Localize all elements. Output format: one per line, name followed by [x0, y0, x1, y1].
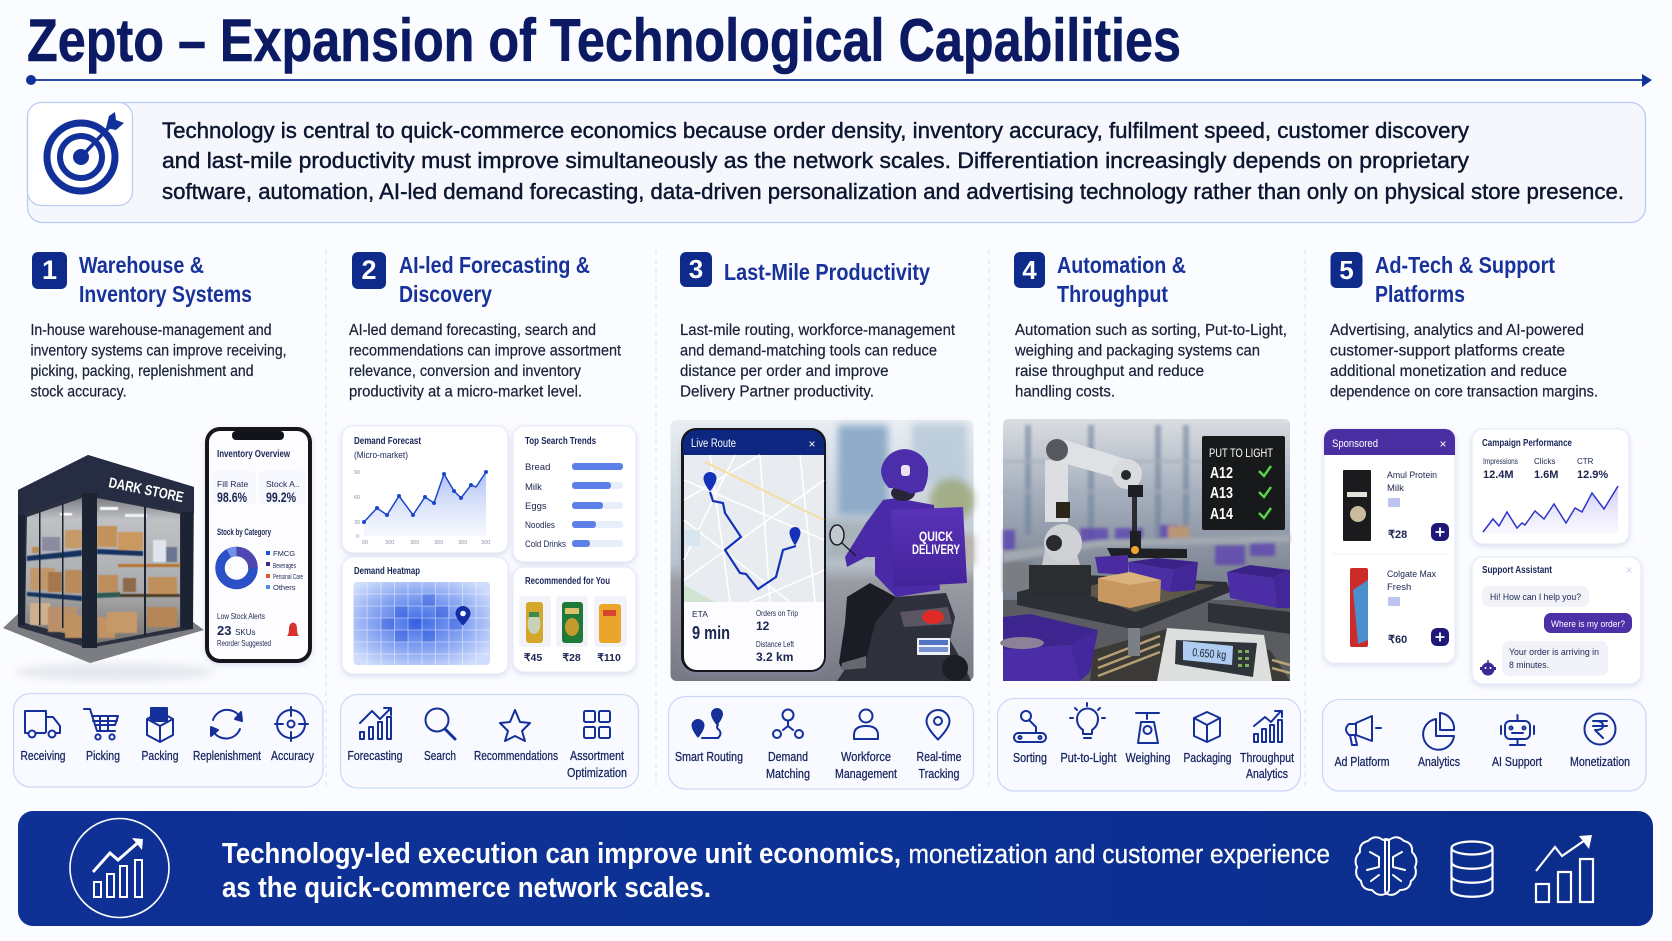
- panel: footer banner: [18, 811, 1653, 926]
- icon labels 5: [1334, 755, 1630, 769]
- body text 4: handling costs.: [1015, 384, 1115, 400]
- map streets: [684, 455, 824, 602]
- body text 1: In-house warehouse-management and: [30, 322, 272, 339]
- icon: demand matching: [773, 710, 803, 738]
- chart: demand forecast: [342, 426, 508, 553]
- icon labels 3: Workforce: [841, 750, 891, 764]
- body text 1: inventory systems can improve receiving,: [30, 342, 286, 360]
- chart: demand forecast: 300: [410, 540, 419, 546]
- heading 5: Platforms: [1375, 281, 1465, 307]
- panel: automation and throughput: [998, 252, 1300, 791]
- icon: put-to-light bulb: [1070, 703, 1105, 738]
- card: recommended for you: [513, 567, 636, 672]
- card: sponsored products: Milk: [1387, 483, 1404, 494]
- body text 3: distance per order and improve: [680, 363, 888, 380]
- chart: campaign performance: Impressions: [1483, 457, 1518, 466]
- icon labels 3: Matching: [766, 767, 810, 781]
- icon: ai support robot: [1501, 715, 1534, 745]
- chart: demand forecast: 300: [385, 540, 394, 546]
- banner text: [222, 838, 1330, 904]
- chart: demand forecast: Demand Forecast: [354, 436, 422, 447]
- icon labels 4: Sorting: [1013, 751, 1047, 765]
- card: support assistant: Support Assistant: [1482, 565, 1553, 576]
- body text 4: raise throughput and reduce: [1015, 363, 1204, 380]
- chart: demand forecast: 30: [354, 520, 360, 526]
- heading 2: Discovery: [399, 281, 492, 307]
- badge 5: [1330, 252, 1362, 288]
- bar chart: top search trends: Bread: [525, 462, 550, 473]
- icon: sorting: [1014, 711, 1046, 742]
- body text 2: AI-led demand forecasting, search and: [349, 322, 596, 339]
- chart: campaign performance: [1472, 429, 1629, 544]
- icon labels 2: Assortment: [570, 749, 624, 763]
- card: support assistant: ×: [1625, 563, 1633, 577]
- icon labels 1: Replenishment: [193, 749, 261, 763]
- heading 4: Throughput: [1057, 281, 1168, 307]
- floor and lower rollers: [1003, 600, 1290, 681]
- body text 3: and demand-matching tools can reduce: [680, 342, 937, 360]
- column dividers: [326, 250, 1305, 790]
- icon: analytics pie: [1423, 713, 1454, 750]
- cardboard box: [1098, 572, 1161, 608]
- bar chart: top search trends: Eggs: [525, 501, 547, 512]
- icon: weighing scale: [1136, 713, 1159, 743]
- icon: forecasting chart: [360, 708, 391, 739]
- route line: [710, 492, 796, 589]
- badge 3: 3: [689, 254, 703, 284]
- badge 2: 2: [361, 255, 377, 285]
- icon labels 1: [20, 749, 315, 763]
- body text 2: productivity at a micro-market level.: [349, 384, 582, 400]
- icon strip 5: [1322, 700, 1646, 791]
- chart: demand forecast: 300: [481, 540, 490, 546]
- chart: campaign performance: CTR: [1577, 457, 1594, 466]
- body text 2: relevance, conversion and inventory: [349, 363, 581, 380]
- icon: accuracy crosshair: [275, 707, 308, 741]
- donut legend: [266, 549, 303, 592]
- body text 5: customer-support platforms create: [1330, 342, 1565, 360]
- body text 5: dependence on core transaction margins.: [1330, 384, 1598, 400]
- dark store illustration: [3, 455, 215, 681]
- phone: inventory overview: Low Stock Alerts: [217, 611, 265, 621]
- phone: live route: ETA: [692, 609, 708, 619]
- chart: demand forecast: 300: [458, 540, 467, 546]
- card: support assistant: Where is my order?: [1551, 619, 1625, 630]
- icon labels 5: Monetization: [1570, 755, 1630, 769]
- weighing scale: 0.650 kg: [1192, 647, 1227, 662]
- panel: ai-led forecasting and discovery: [340, 252, 638, 788]
- body text 4: weighing and packaging systems can: [1014, 342, 1260, 360]
- icon labels 4: Weighing: [1126, 751, 1171, 765]
- phone: inventory overview: 23 SKUs: [217, 623, 256, 638]
- icon labels 2: Optimization: [567, 766, 627, 780]
- icon labels 1: Accuracy: [271, 749, 315, 763]
- phone: live route: 3.2 km: [756, 650, 793, 664]
- phone: live route: Orders on Trip: [756, 608, 798, 618]
- icon labels 4: Put-to-Light: [1060, 751, 1117, 765]
- icon strip 2: [340, 694, 638, 788]
- badge 3: [680, 252, 712, 287]
- icon labels 3: Tracking: [918, 767, 960, 781]
- heading 1: [79, 252, 252, 307]
- scooter and rider: [830, 449, 971, 681]
- icon labels 1: Packing: [142, 749, 179, 763]
- body text 3: Last-mile routing, workforce-management: [680, 322, 956, 339]
- card: recommended for you: ₹28: [562, 652, 581, 664]
- icon: truck: [25, 711, 60, 738]
- icon: assortment grid: [584, 711, 610, 738]
- chart: campaign performance: 12.9%: [1577, 469, 1608, 481]
- weighing scale: [1157, 628, 1272, 681]
- chart: campaign performance: Campaign Performance: [1482, 438, 1572, 449]
- heading 2: AI-led Forecasting &: [399, 252, 590, 278]
- heading 3: Last-Mile Productivity: [724, 259, 930, 285]
- icon labels 3: Management: [835, 767, 897, 781]
- icon labels 1: Receiving: [20, 749, 66, 763]
- donut legend: FMCG: [273, 549, 295, 558]
- icon labels 5: AI Support: [1492, 755, 1542, 769]
- card: sponsored products: ₹60: [1388, 634, 1407, 646]
- scooter and rider: QUICK: [919, 529, 953, 544]
- icon labels 3: Smart Routing: [675, 750, 743, 764]
- card: recommended for you: ₹110: [597, 652, 621, 664]
- dark store illustration: DARK STORE: [107, 475, 185, 506]
- badge 2: [352, 252, 386, 289]
- icon labels 4: Throughput: [1240, 751, 1294, 765]
- sign: put to light: A12: [1210, 465, 1233, 482]
- card: sponsored products: Amul Protein: [1387, 470, 1437, 481]
- body text 5: Advertising, analytics and AI-powered: [1330, 322, 1584, 339]
- heading 4: Automation &: [1057, 252, 1186, 278]
- badge 4: 4: [1022, 255, 1037, 285]
- intro text: software, automation, AI-led demand forecasting, data-driven personalization and advertising technology rather than only on physical store presence.: [162, 179, 1624, 204]
- icon strip 3: [668, 696, 974, 789]
- sign: put to light: A13: [1210, 485, 1233, 502]
- card: recommended for you: ₹45: [524, 652, 542, 664]
- phone: live route: Distance Left: [756, 639, 794, 649]
- panel: last-mile productivity: [668, 252, 974, 789]
- sign: put to light: A14: [1210, 506, 1233, 523]
- heading 2: [399, 252, 590, 307]
- phone: live route: Live Route: [691, 438, 736, 450]
- body text 2: recommendations can improve assortment: [349, 342, 622, 360]
- icon labels 3: Demand: [768, 750, 808, 764]
- conveyor table: [1017, 575, 1230, 630]
- icon labels 2: Forecasting: [348, 749, 403, 763]
- heading 1: Warehouse &: [79, 252, 204, 278]
- title: Zepto – Expansion of Technological Capabilities: [27, 7, 1181, 74]
- chart: campaign performance: Clicks: [1534, 457, 1555, 466]
- badge 4: [1014, 252, 1045, 288]
- icon labels 2: Search: [424, 749, 456, 763]
- card: support assistant: Hi! How can I help you?: [1490, 592, 1581, 603]
- body text 5: additional monetization and reduce: [1330, 363, 1567, 380]
- sign: put to light: PUT TO LIGHT: [1209, 446, 1274, 460]
- badge 1: [32, 252, 67, 289]
- donut legend: Personal Care: [273, 572, 303, 581]
- donut chart: [214, 546, 259, 590]
- body text 3: [680, 322, 956, 400]
- phone: inventory overview: Inventory Overview: [217, 448, 291, 460]
- illustration: robot arm and conveyor: [1000, 419, 1290, 681]
- icon: bell: [287, 622, 299, 636]
- bar chart: top search trends: Noodles: [525, 520, 555, 531]
- arrow: title rule: [26, 74, 1652, 87]
- icon: monetization rupee: [1584, 714, 1616, 744]
- icon: real-time tracking pin: [926, 710, 950, 740]
- icon: workforce person: [854, 710, 878, 739]
- panel: ad-tech and support platforms: [1322, 252, 1646, 791]
- intro text: [162, 118, 1624, 204]
- icon: map pin: [456, 606, 470, 626]
- chart: demand forecast: 300: [434, 540, 443, 546]
- shelves and boxes: [32, 547, 39, 553]
- card: recommended for you: Recommended for You: [525, 576, 610, 587]
- icon labels 2: Recommendations: [474, 749, 558, 763]
- banner text: as the quick-commerce network scales.: [222, 872, 711, 904]
- icon: brain: [1356, 837, 1416, 895]
- intro text: Technology is central to quick-commerce economics because order density, inventory accuracy, fulfilment speed, customer discovery: [162, 118, 1469, 143]
- bar chart: top search trends: Milk: [525, 482, 542, 493]
- icon labels 4: [1013, 751, 1294, 781]
- sign: put to light: [1202, 436, 1285, 530]
- body text 1: [30, 322, 286, 400]
- icon strip 1: [14, 694, 323, 787]
- icon: ad platform megaphone: [1346, 716, 1381, 745]
- card: sponsored products: Sponsored: [1332, 438, 1378, 450]
- icon: package: [1194, 712, 1220, 742]
- heading 4: [1057, 252, 1186, 307]
- chart: campaign performance: 12.4M: [1483, 469, 1514, 481]
- icon: replenishment cycle: [211, 710, 242, 739]
- donut legend: Beverages: [273, 561, 296, 570]
- badge 1: 1: [42, 255, 57, 285]
- panel: warehouse and inventory systems: [3, 252, 323, 787]
- chart: demand forecast: 00: [362, 540, 368, 546]
- panel: intro: [28, 102, 1646, 222]
- body text 1: picking, packing, replenishment and: [30, 363, 254, 380]
- phone: live route: 9 min: [692, 623, 730, 643]
- phone: inventory overview: Stock A..: [266, 479, 300, 489]
- icon: database: [1452, 842, 1492, 897]
- heading 5: [1375, 252, 1555, 307]
- bar chart: top search trends: Top Search Trends: [525, 436, 596, 447]
- card: support assistant: [1472, 557, 1641, 684]
- card: support assistant: 8 minutes.: [1509, 660, 1549, 671]
- icon: star: [500, 710, 530, 741]
- intro text: and last-mile productivity must improve simultaneously as the network scales. Differentiation increasingly depends on proprietary: [162, 148, 1469, 173]
- icon labels 4: Packaging: [1184, 751, 1232, 765]
- illustration: delivery rider: [670, 420, 974, 681]
- chart: demand forecast: 60: [354, 495, 360, 501]
- card: support assistant: Your order is arriving in: [1509, 647, 1599, 658]
- phone: inventory overview: 98.6%: [217, 490, 247, 505]
- icon: packing box: [147, 708, 173, 742]
- icon labels 3: Real-time: [916, 750, 962, 764]
- scooter and rider: DELIVERY: [912, 542, 960, 557]
- bar chart: top search trends: Cold Drinks: [525, 539, 566, 550]
- phone: inventory overview: Stock by Category: [217, 527, 271, 537]
- card: sponsored products: ×: [1439, 437, 1447, 451]
- icon: search: [426, 708, 455, 739]
- chart: demand forecast: (Micro-market): [354, 450, 408, 461]
- icon: growth chart in circle: [70, 818, 169, 918]
- banner text: Technology-led execution can improve unit economics,: [222, 838, 901, 870]
- body text 1: stock accuracy.: [30, 384, 126, 400]
- body text 2: [349, 322, 622, 400]
- icon labels 2: [348, 749, 627, 780]
- icon labels 5: Analytics: [1418, 755, 1460, 769]
- heading 5: Ad-Tech & Support: [1375, 252, 1555, 278]
- card: sponsored products: [1324, 429, 1455, 663]
- card: sponsored products: Colgate Max: [1387, 569, 1436, 580]
- icon: smart routing: [692, 709, 722, 738]
- chart: demand forecast: 90: [354, 470, 360, 476]
- phone: inventory overview: Fill Rate: [217, 479, 248, 489]
- purple bins: [1000, 555, 1290, 681]
- icon: target with dart: [28, 102, 132, 206]
- phone: inventory overview: Reorder Suggested: [217, 638, 271, 648]
- icon: throughput analytics: [1254, 711, 1282, 742]
- phone: inventory overview: [205, 427, 312, 663]
- chart: demand heatmap: [342, 557, 508, 674]
- phone: inventory overview: 99.2%: [266, 490, 296, 505]
- icon: cart: [84, 709, 118, 740]
- body text 3: Delivery Partner productivity.: [680, 384, 874, 400]
- icon labels 4: Analytics: [1246, 767, 1288, 781]
- bar chart: top search trends: [513, 426, 636, 562]
- chart: campaign performance: 1.6M: [1534, 469, 1558, 481]
- heading 1: Inventory Systems: [79, 281, 252, 307]
- chart: demand forecast: 0: [356, 534, 359, 540]
- card: sponsored products: Fresh: [1387, 582, 1411, 593]
- donut legend: Others: [273, 583, 296, 592]
- icon labels 1: Picking: [86, 749, 120, 763]
- body text 4: [1014, 322, 1287, 400]
- icon labels 5: Ad Platform: [1334, 755, 1390, 769]
- icon: growth bars: [1536, 835, 1593, 902]
- body text 5: [1330, 322, 1598, 400]
- badge 5: 5: [1339, 255, 1354, 285]
- card: sponsored products: ₹28: [1388, 529, 1407, 541]
- chart: demand heatmap: Demand Heatmap: [354, 566, 420, 577]
- banner text: monetization and customer experience: [908, 841, 1330, 869]
- icon: chat robot: [1480, 660, 1496, 676]
- icon labels 3: [675, 750, 962, 781]
- icon strip 4: [998, 698, 1300, 791]
- phone: live route: 12: [756, 619, 770, 633]
- phone: live route: [681, 428, 826, 672]
- phone: live route: ×: [808, 437, 816, 451]
- robot arm: [1029, 439, 1187, 595]
- body text 4: Automation such as sorting, Put-to-Light,: [1015, 322, 1287, 339]
